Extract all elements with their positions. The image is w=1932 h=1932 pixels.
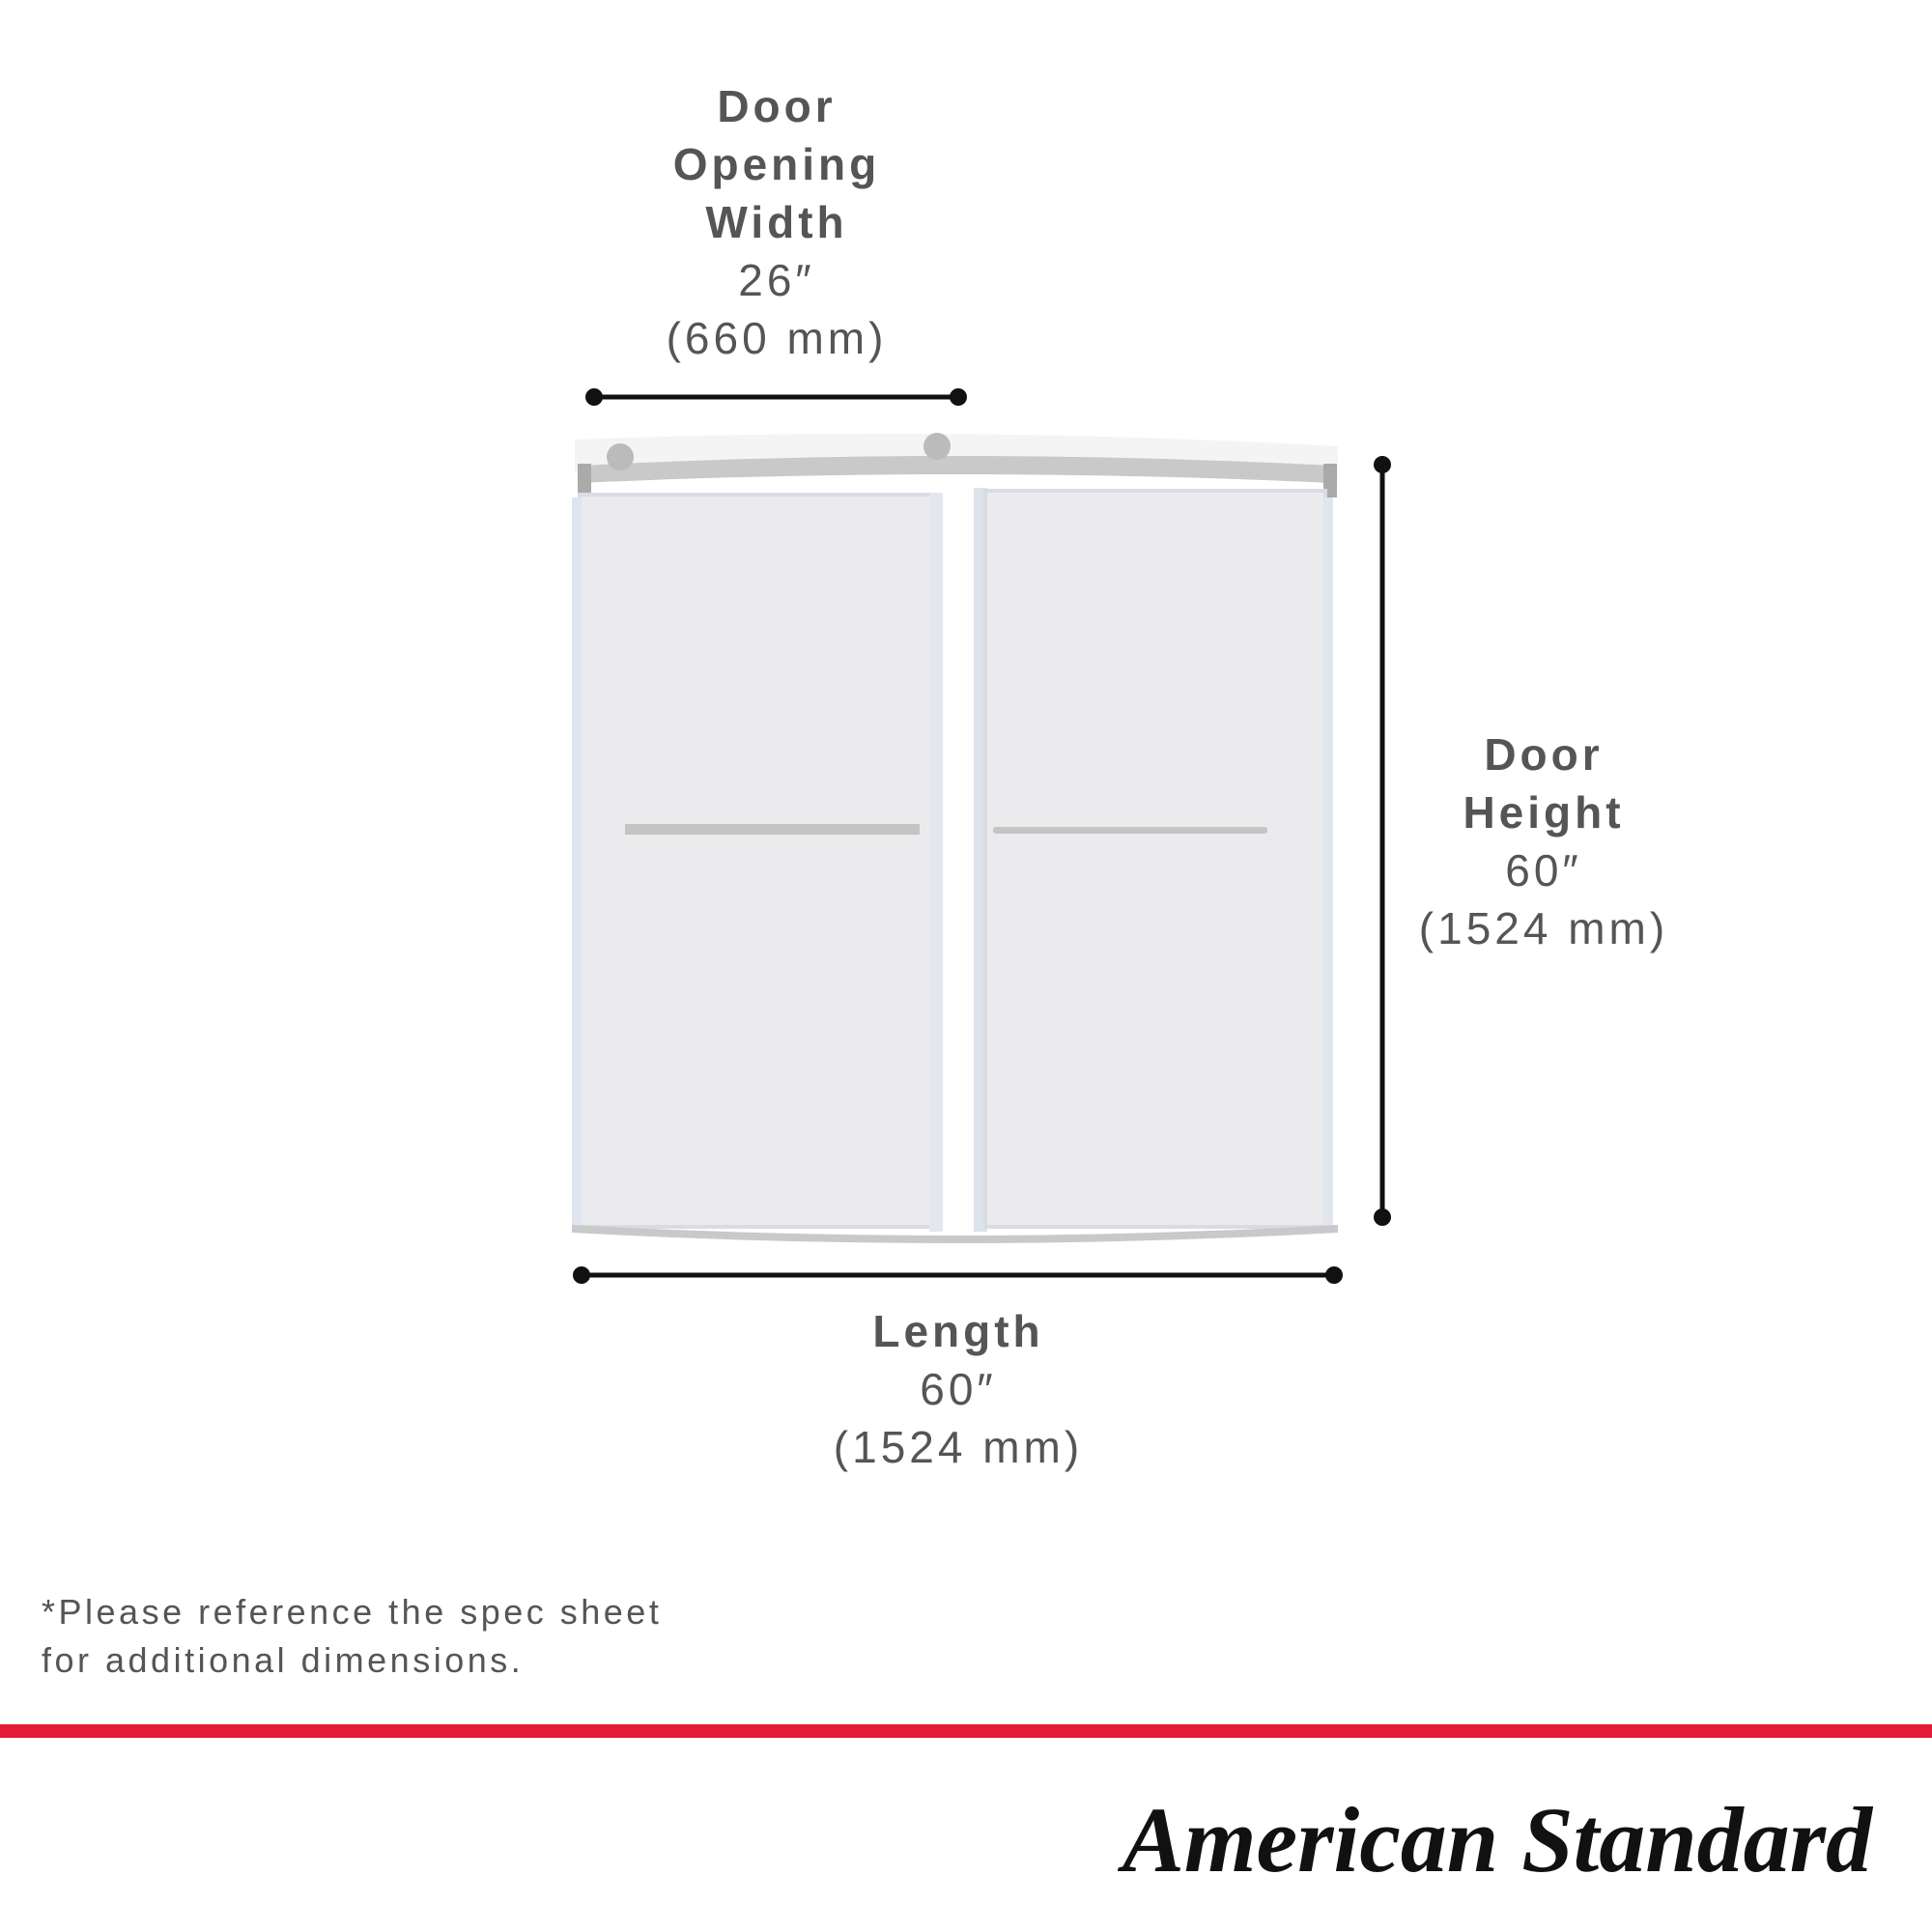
label: door opening width: Opening <box>673 139 880 189</box>
logo: American Standard: American Standard <box>1122 1788 1872 1891</box>
label: door opening width: (660 mm) <box>667 313 887 363</box>
label: door height: (1524 mm) <box>1419 903 1668 953</box>
label: door opening width: Width <box>705 197 848 247</box>
label: door opening width <box>667 81 887 363</box>
shower door <box>572 433 1338 1243</box>
red divider bar <box>0 1724 1932 1738</box>
label: length: Length <box>872 1306 1044 1356</box>
label: door height: 60″ <box>1505 845 1582 895</box>
dimension line: height <box>1374 456 1391 1226</box>
dimension line: length <box>573 1266 1343 1284</box>
label: door height <box>1419 729 1668 953</box>
footnote: for additional dimensions. <box>42 1640 524 1680</box>
label: door height: Height <box>1463 787 1625 838</box>
label: door height: Door <box>1484 729 1604 780</box>
label: length: 60″ <box>920 1364 997 1414</box>
footnote <box>42 1592 662 1680</box>
footnote: *Please reference the spec sheet <box>42 1592 662 1632</box>
label: door opening width: 26″ <box>738 255 815 305</box>
label: door opening width: Door <box>717 81 837 131</box>
label: length: (1524 mm) <box>834 1422 1083 1472</box>
label: length <box>834 1306 1083 1472</box>
dimension line: opening width <box>585 388 967 406</box>
